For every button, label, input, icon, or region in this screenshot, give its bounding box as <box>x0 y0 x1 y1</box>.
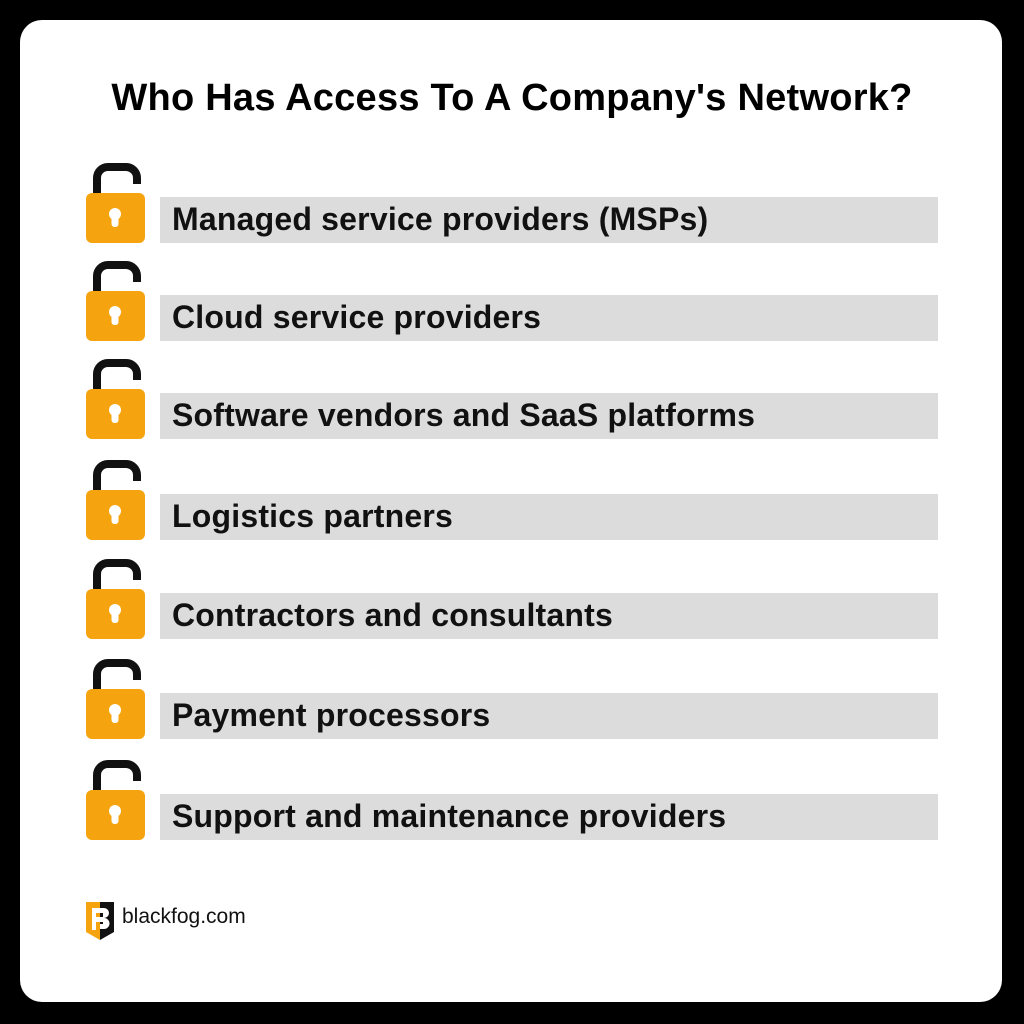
label bar <box>160 593 938 639</box>
logo: blackfog: blackfog.com <box>122 905 246 928</box>
icon: open lock <box>86 559 145 639</box>
label bar: Logistics partners <box>172 498 453 534</box>
label bar: Managed service providers (MSPs) <box>172 201 708 237</box>
label bar <box>160 693 938 739</box>
label bar <box>160 794 938 840</box>
label bar <box>160 197 938 243</box>
label bar <box>160 393 938 439</box>
label bar <box>160 295 938 341</box>
label bar: Cloud service providers <box>172 299 541 335</box>
row 5 <box>86 559 938 639</box>
icon: open lock <box>86 163 145 243</box>
row 7 <box>86 760 938 840</box>
label bar: Support and maintenance providers <box>172 798 726 834</box>
title: Who Has Access To A Company's Network? <box>111 77 913 119</box>
icon: open lock <box>86 659 145 739</box>
row 6 <box>86 659 938 739</box>
row 1 <box>86 163 938 243</box>
label bar: Contractors and consultants <box>172 597 613 633</box>
row 4 <box>86 460 938 540</box>
logo: blackfog <box>86 902 246 940</box>
label bar: Software vendors and SaaS platforms <box>172 397 755 433</box>
icon: open lock <box>86 460 145 540</box>
icon: open lock <box>86 261 145 341</box>
row 3 <box>86 359 938 439</box>
row 2 <box>86 261 938 341</box>
icon: open lock <box>86 359 145 439</box>
label bar: Payment processors <box>172 697 490 733</box>
label bar <box>160 494 938 540</box>
icon: open lock <box>86 760 145 840</box>
